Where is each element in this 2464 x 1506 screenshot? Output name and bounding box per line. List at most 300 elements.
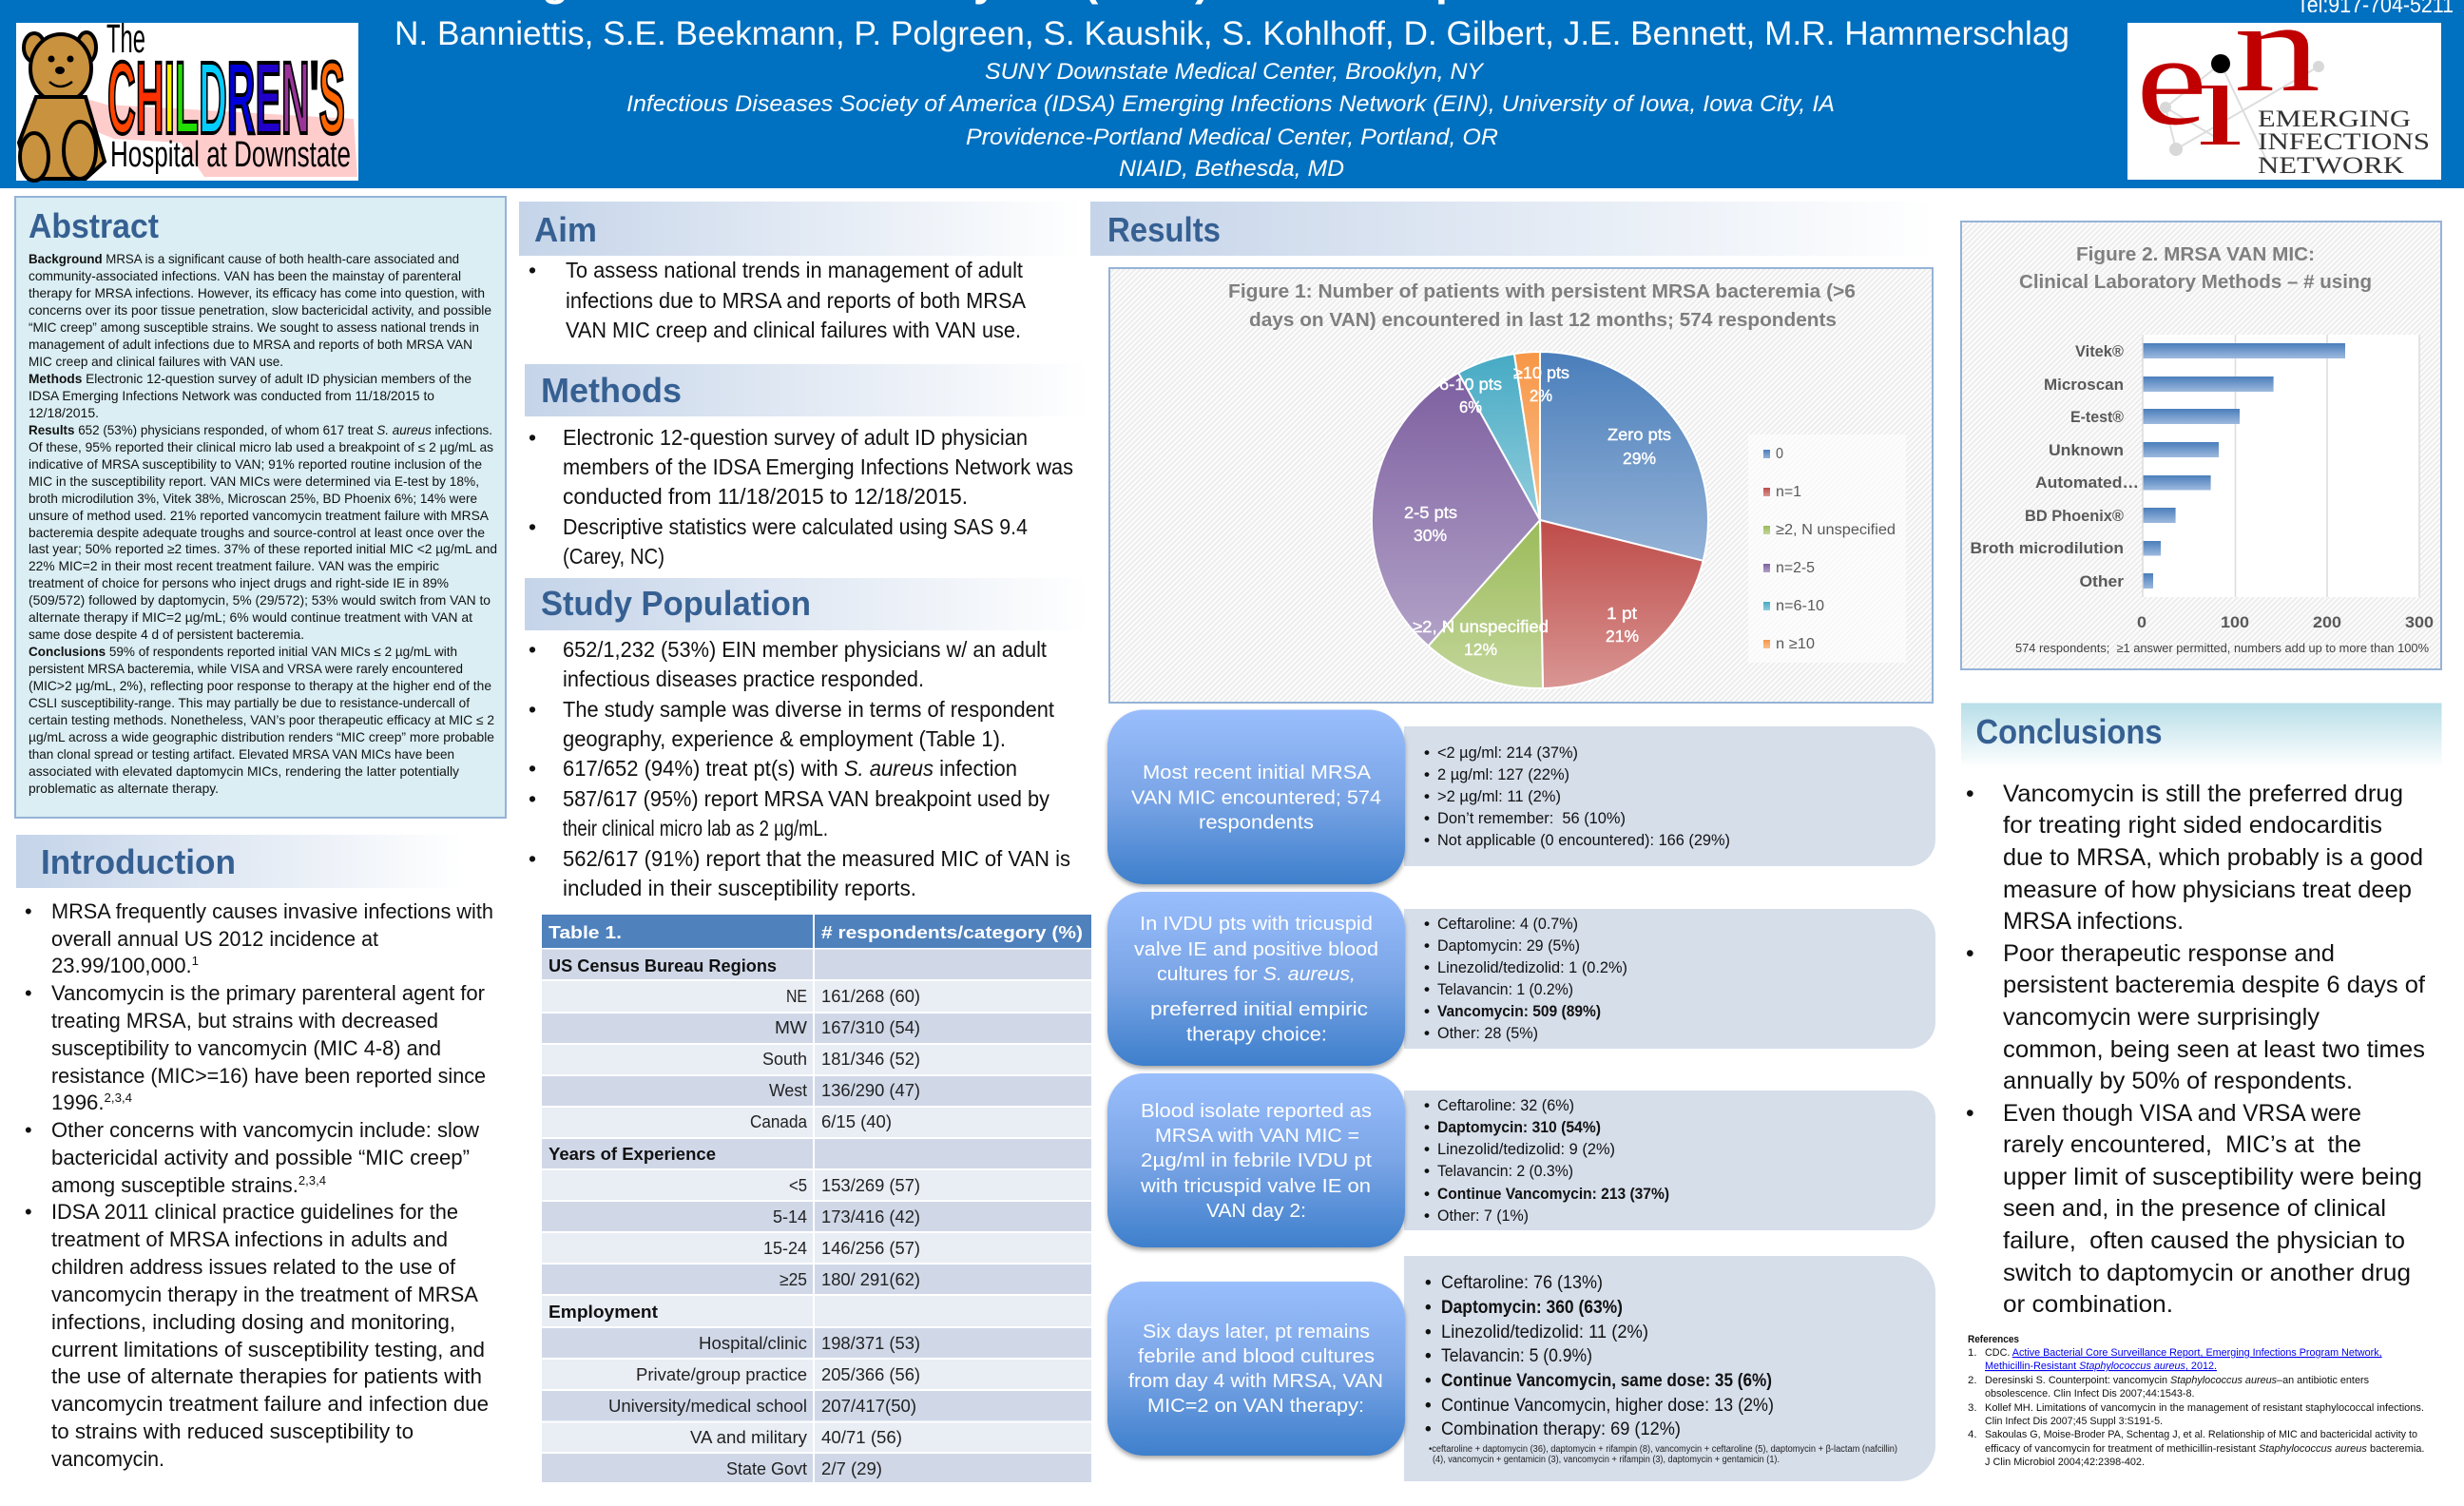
question box: VAN day 2: [1206, 1201, 1306, 1222]
question box [1107, 892, 1405, 1066]
result row 3: VAN MIC 2 on day 2 [1107, 1073, 1935, 1247]
question box: with tricuspid valve IE on [1140, 1176, 1371, 1197]
answers list: Not applicable (0 encountered): 166 (29%) [1437, 831, 1730, 849]
abstract body text: (MIC>2 µg/mL, 2%), reflecting poor response to therapy at the higher end of the [29, 679, 491, 693]
bar category labels [1970, 342, 2139, 590]
answers list: • [1424, 831, 1430, 849]
conclusions bullet list: upper limit of susceptibility were being [2003, 1165, 2422, 1190]
result row 4: six days later [1107, 1256, 1935, 1481]
panel: aim [519, 202, 1084, 342]
abstract body text: concerns over its poor tissue penetration, slow bactericidal activity, and possible [29, 303, 491, 318]
answers list: • [1424, 765, 1430, 783]
abstract body text: 22% MIC=2 in their most recent treatment failure. VAN was the empiric [29, 559, 439, 573]
table rows: 180/ 291(62) [821, 1269, 920, 1289]
question box: cultures for S. aureus, [1157, 964, 1356, 985]
abstract body text [29, 252, 497, 796]
table rows: 207/417(50) [821, 1396, 916, 1416]
abstract body text: problematic as alternate therapy. [29, 782, 219, 796]
figure 2: bar chart panel [1961, 222, 2441, 669]
icon: Emerging Infections Network logo: EMERGING [2258, 106, 2411, 132]
answers list: Don’t remember: 56 (10%) [1437, 809, 1626, 827]
question box: VAN MIC encountered; 574 [1131, 787, 1381, 808]
figure 2 title: Clinical Laboratory Methods – # using [2019, 271, 2372, 293]
figure 2 title: Figure 2. MRSA VAN MIC: [2076, 243, 2315, 265]
icon: Emerging Infections Network logo: INFECTIONS [2258, 129, 2430, 155]
heading: study population: Study Population [541, 584, 811, 623]
references: CDC. Active Bacterial Core Surveillance Report, Emerging Infections Program Network, [1985, 1347, 2382, 1359]
abstract body text: 12/18/2015. [29, 406, 99, 420]
combination therapy footnote [1429, 1444, 1897, 1465]
table rows: Employment [549, 1302, 658, 1322]
introduction bullet list: MRSA frequently causes invasive infections with [51, 899, 493, 923]
figure 1 title: Figure 1: Number of patients with persistent MRSA bacteremia (>6 [1228, 280, 1856, 302]
abstract body text: broth microdilution 3%, Vitek 38%, Microscan 25%, BD Phoenix 6%; 14% were [29, 492, 477, 506]
answers list: Other: 7 (1%) [1437, 1207, 1529, 1225]
study population text: 617/652 (94%) treat pt(s) with S. aureus infection [563, 756, 1017, 781]
question box: Most recent initial MRSA [1143, 763, 1372, 783]
heading: abstract: Abstract [29, 206, 159, 245]
aim text: To assess national trends in management of adult [566, 258, 1024, 282]
table rows: 181/346 (52) [821, 1049, 920, 1069]
bar value axis labels: 200 [2313, 613, 2341, 631]
figure 1: pie chart panel [1109, 268, 1933, 703]
pie legend [1748, 434, 1906, 663]
answers list: Daptomycin: 360 (63%) [1441, 1298, 1623, 1318]
panel: study population [525, 578, 1089, 900]
result row 1: most recent initial MIC [1107, 709, 1935, 884]
references: J Clin Microbiol 2004;42:2398-402. [1985, 1457, 2145, 1468]
conclusions bullet list: for treating right sided endocarditis [2003, 813, 2382, 839]
bar category labels: BD Phoenix® [2025, 507, 2124, 525]
methods text: Descriptive statistics were calculated using SAS 9.4 [563, 514, 1028, 539]
answers list: 2 µg/ml: 127 (22%) [1437, 765, 1569, 783]
answers list: • [1425, 1371, 1432, 1391]
introduction bullet list: current limitations of susceptibility testing, and [51, 1338, 485, 1361]
answers list: Ceftaroline: 76 (13%) [1441, 1273, 1603, 1293]
bar category labels: Vitek® [2075, 342, 2124, 360]
pie data labels: 6-10 pts [1439, 375, 1502, 394]
bar value axis labels: 100 [2221, 613, 2249, 631]
answers list: Telavancin: 5 (0.9%) [1441, 1346, 1592, 1366]
question box: respondents [1199, 813, 1314, 834]
answers list: Continue Vancomycin: 213 (37%) [1437, 1185, 1669, 1203]
references: Sakoulas G, Moise-Broder PA, Schentag J, et al. Relationship of MIC and bactericidal activity to [1985, 1429, 2417, 1440]
references: References [1968, 1334, 2019, 1345]
conclusions bullet list: rarely encountered, MIC’s at the [2003, 1132, 2361, 1158]
abstract body text: (509/572) followed by daptomycin, 5% (29/572); 53% would switch from VAN to [29, 593, 491, 608]
table rows: 136/290 (47) [821, 1080, 920, 1100]
introduction bullet list: 1 [192, 954, 199, 968]
references [1968, 1334, 2424, 1468]
table rows: State Govt [726, 1458, 807, 1478]
table rows: Years of Experience [549, 1144, 716, 1164]
introduction bullet list: resistance (MIC>=16) have been reported since [51, 1064, 486, 1088]
pie legend: ≥2, N unspecified [1776, 522, 1896, 538]
answers list: • [1425, 1346, 1432, 1366]
table rows: MW [775, 1017, 808, 1037]
answers list: • [1424, 958, 1430, 976]
answers list [1425, 1273, 1774, 1439]
table rows: 6/15 (40) [821, 1111, 892, 1131]
introduction bullet list: • [25, 981, 32, 1005]
table rows: 15-24 [763, 1238, 807, 1258]
answers list: Telavancin: 1 (0.2%) [1437, 980, 1573, 998]
introduction bullet list: infections, including dosing and monitoring, [51, 1310, 455, 1334]
affiliations: Infectious Diseases Society of America (IDSA) Emerging Infections Network (EIN), University of Iowa, Iowa City, IA [626, 91, 1835, 117]
pie legend: n ≥10 [1776, 636, 1815, 652]
table header [542, 915, 1091, 948]
abstract body text: Background MRSA is a significant cause of both health-care associated and [29, 252, 459, 266]
answers list: • [1425, 1323, 1432, 1342]
introduction bullet list: • [25, 899, 32, 923]
study population text: their clinical micro lab as 2 µg/mL. [563, 816, 828, 840]
table rows [542, 915, 1091, 1482]
table rows: 198/371 (53) [821, 1333, 920, 1353]
abstract body text: MIC creep and clinical failures with VAN use. [29, 355, 283, 369]
header band [0, 0, 2464, 188]
bar category labels: Microscan [2044, 376, 2124, 394]
introduction bullet list: bactericidal activity and possible “MIC creep” [51, 1146, 470, 1169]
panel: results heading bar: Results [1107, 210, 1221, 249]
aim text: infections due to MRSA and reports of both MRSA [566, 288, 1027, 313]
answers list: • [1424, 1162, 1430, 1180]
answers list [1424, 915, 1627, 1042]
table rows: West [769, 1080, 807, 1100]
introduction bullet list: susceptibility to vancomycin (MIC 4-8) and [51, 1036, 441, 1060]
question box: MIC=2 on VAN therapy: [1147, 1396, 1364, 1417]
question box: Six days later, pt remains [1143, 1322, 1370, 1342]
pie data labels: 30% [1414, 526, 1447, 545]
conclusions bullet list: measure of how physicians treat deep [2003, 878, 2412, 903]
question box: In IVDU pts with tricuspid [1140, 914, 1373, 935]
title (cropped at the top edge, only descenders visible) [542, 0, 1462, 5]
answers list: Ceftaroline: 32 (6%) [1437, 1096, 1574, 1114]
table rows: South [762, 1049, 807, 1069]
pie legend: 0 [1776, 446, 1783, 462]
introduction bullet list [25, 899, 493, 1471]
question box: preferred initial empiric [1150, 999, 1368, 1020]
answers list: • [1425, 1419, 1432, 1439]
abstract body text: Methods Electronic 12-question survey of adult ID physician members of the [29, 372, 472, 386]
table rows: 40/71 (56) [821, 1427, 902, 1447]
introduction bullet list: treating MRSA, but strains with decreased [51, 1009, 438, 1033]
answers list: • [1424, 787, 1430, 805]
references: 1. [1968, 1347, 1977, 1359]
answers list: Linezolid/tedizolid: 1 (0.2%) [1437, 958, 1627, 976]
introduction bullet list: Vancomycin is the primary parenteral agent for [51, 981, 485, 1005]
answers list: Daptomycin: 29 (5%) [1437, 936, 1580, 955]
study population text: infectious diseases practice responded. [563, 666, 924, 691]
table rows: 5-14 [773, 1207, 807, 1226]
abstract body text: certain testing methods. Nonetheless, VAN’s poor therapeutic efficacy at MIC ≤ 2 [29, 713, 494, 727]
answers list: Linezolid/tedizolid: 9 (2%) [1437, 1140, 1615, 1158]
table rows: VA and military [690, 1427, 808, 1447]
pie data labels: 21% [1606, 627, 1639, 646]
panel: abstract [15, 197, 506, 818]
table rows: NE [786, 986, 807, 1006]
heading: introduction: Introduction [41, 842, 236, 881]
study population text: • [529, 846, 536, 871]
conclusions bullet list [1966, 782, 2425, 1318]
table rows: 146/256 (57) [821, 1238, 920, 1258]
abstract body text: bacteremia despite adequate troughs and source-control at least once over the [29, 526, 485, 540]
affiliations: SUNY Downstate Medical Center, Brooklyn, NY [985, 59, 1485, 85]
affiliations [626, 59, 1835, 182]
conclusions bullet list: MRSA infections. [2003, 909, 2184, 935]
introduction bullet list: 2,3,4 [298, 1173, 326, 1187]
conclusions bullet list: seen and, in the presence of clinical [2003, 1196, 2386, 1222]
icon: Emerging Infections Network logo: e [2136, 10, 2207, 152]
question box: febrile and blood cultures [1138, 1346, 1375, 1367]
pie legend: n=6-10 [1776, 598, 1824, 614]
question box: MRSA with VAN MIC = [1155, 1126, 1359, 1147]
table rows: <5 [789, 1175, 807, 1195]
table rows: 2/7 (29) [821, 1458, 882, 1478]
icon: Children's Hospital at Downstate logo: Hospital at Downstate [110, 135, 351, 175]
study population text: • [529, 756, 536, 781]
combination therapy footnote: •ceftaroline + daptomycin (36), daptomycin + rifampin (8), vancomycin + ceftaroline (5), daptomycin + β-lactam (nafcillin) [1429, 1444, 1897, 1455]
answers list: Vancomycin: 509 (89%) [1437, 1002, 1601, 1020]
conclusions bullet list: switch to daptomycin or another drug [2003, 1261, 2411, 1286]
introduction bullet list: Other concerns with vancomycin include: slow [51, 1118, 479, 1142]
conclusions bullet list: • [1966, 1101, 1974, 1127]
answers list: • [1424, 1118, 1430, 1136]
answers list: >2 µg/ml: 11 (2%) [1437, 787, 1561, 805]
answers list: Other: 28 (5%) [1437, 1024, 1538, 1042]
abstract body text: same dose despite 4 d of persistent bacteremia. [29, 628, 304, 642]
pie data labels: 29% [1623, 449, 1656, 468]
icon: Emerging Infections Network logo [2127, 0, 2441, 180]
bar chart plot area [2143, 335, 2419, 597]
answers list: • [1424, 1024, 1430, 1042]
figure 2 title [2019, 243, 2372, 293]
question box [1107, 1073, 1405, 1247]
table rows: Private/group practice [636, 1364, 807, 1384]
methods text: conducted from 11/18/2015 to 12/18/2015. [563, 484, 968, 509]
heading: aim: Aim [534, 210, 597, 249]
introduction bullet list: vancomycin. [51, 1447, 164, 1471]
bar value axis labels [2137, 613, 2434, 631]
affiliations: NIAID, Bethesda, MD [1119, 156, 1344, 182]
conclusions bullet list: Poor therapeutic response and [2003, 941, 2335, 967]
table rows: US Census Bureau Regions [549, 956, 777, 975]
study population text: geography, experience & employment (Table 1). [563, 726, 1006, 751]
study population text: • [529, 637, 536, 662]
pie data labels: ≥10 pts [1513, 363, 1569, 382]
question box: therapy choice: [1186, 1025, 1327, 1046]
answers list: Ceftaroline: 4 (0.7%) [1437, 915, 1578, 933]
pie data labels: 1 pt [1607, 604, 1637, 623]
conclusions bullet list: annually by 50% of respondents. [2003, 1069, 2353, 1094]
abstract body text: CSLI susceptibility-range. This may partially be due to resistance-undercall of [29, 696, 470, 710]
bar chart note: 574 respondents; ≥1 answer permitted, numbers add up to more than 100% [2015, 641, 2429, 655]
conclusions bullet list: or combination. [2003, 1292, 2173, 1318]
answers list: • [1424, 1140, 1430, 1158]
abstract body text: treatment of choice for persons who inject drugs and right-side IE in 89% [29, 576, 449, 590]
bar category labels: E-test® [2070, 408, 2124, 426]
pie data labels: 2% [1530, 386, 1552, 405]
abstract body text: community-associated infections. VAN has been the mainstay of parenteral [29, 269, 461, 283]
introduction bullet list: overall annual US 2012 incidence at [51, 927, 378, 951]
study population text: 562/617 (91%) report that the measured MIC of VAN is [563, 846, 1070, 871]
abstract body text: Conclusions 59% of respondents reported initial VAN MICs ≤ 2 µg/mL with [29, 645, 457, 659]
bar category labels: Automated… [2035, 473, 2139, 492]
methods text: (Carey, NC) [563, 544, 664, 569]
answers list: • [1424, 1207, 1430, 1225]
pie data labels: 6% [1459, 397, 1482, 416]
introduction bullet list: IDSA 2011 clinical practice guidelines for the [51, 1200, 458, 1224]
result row 2: IVDU preferred empiric therapy [1107, 892, 1935, 1066]
abstract body text: associated with elevated daptomycin MICs, rendering the latter potentially [29, 764, 459, 779]
authors: N. Banniettis, S.E. Beekmann, P. Polgreen, S. Kaushik, S. Kohlhoff, D. Gilbert, J.E. Bennett, M.R. Hammerschlag [395, 15, 2069, 52]
icon: Emerging Infections Network logo: NETWORK [2258, 153, 2404, 179]
introduction bullet list: 2,3,4 [105, 1091, 132, 1105]
figure 1 title [1228, 280, 1856, 331]
abstract body text: “MIC creep” among susceptible strains. We sought to assess national trends in [29, 320, 479, 335]
table rows: University/medical school [608, 1396, 807, 1416]
abstract body text: than clonal spread or testing artifact. Elevated MRSA VAN MICs have been [29, 747, 454, 762]
study population text: 652/1,232 (53%) EIN member physicians w/ an adult [563, 637, 1048, 662]
conclusions bullet list: Vancomycin is still the preferred drug [2003, 782, 2403, 807]
bar category labels: Broth microdilution [1970, 539, 2124, 557]
abstract body text: IDSA Emerging Infections Network was conducted from 11/18/2015 to [29, 389, 434, 403]
table rows: ≥25 [780, 1269, 807, 1289]
pie legend: n=1 [1776, 484, 1801, 500]
conclusions bullet list: Even though VISA and VRSA were [2003, 1101, 2361, 1127]
pie slices [1372, 352, 1708, 688]
question box: Blood isolate reported as [1141, 1101, 1372, 1122]
question box: 2µg/ml in febrile IVDU pt [1141, 1150, 1372, 1171]
table rows: 173/416 (42) [821, 1207, 920, 1226]
references: Kollef MH. Limitations of vancomycin in the management of resistant staphylococcal infections. [1985, 1402, 2424, 1414]
conclusions bullet list: due to MRSA, which probably is a good [2003, 845, 2423, 871]
icon: Children's Hospital at Downstate logo [16, 16, 358, 181]
bar category labels: Unknown [2049, 441, 2124, 459]
table rows: 205/366 (56) [821, 1364, 920, 1384]
references: Methicillin-Resistant Staphylococcus aureus, 2012. [1985, 1361, 2217, 1372]
references: 3. [1968, 1402, 1977, 1414]
table rows: 153/269 (57) [821, 1175, 920, 1195]
pie data labels: ≥2, N unspecified [1413, 617, 1549, 636]
table header: Table 1. [549, 922, 622, 942]
answers list: Linezolid/tedizolid: 11 (2%) [1441, 1323, 1648, 1342]
references: efficacy of vancomycin for treatment of methicillin-resistant Staphylococcus aureus bacteremia. [1985, 1443, 2424, 1455]
panel: methods [525, 364, 1089, 569]
abstract body text: Of these, 95% reported their clinical micro lab used a breakpoint of ≤ 2 µg/mL as [29, 440, 493, 454]
references: 2. [1968, 1375, 1977, 1386]
answers list: • [1425, 1298, 1432, 1318]
study population text: 587/617 (95%) report MRSA VAN breakpoint used by [563, 786, 1049, 811]
question box: from day 4 with MRSA, VAN [1128, 1371, 1383, 1392]
answers list: Continue Vancomycin, same dose: 35 (6%) [1441, 1371, 1772, 1391]
answers list [1424, 743, 1730, 849]
introduction bullet list: vancomycin therapy in the treatment of MRSA [51, 1283, 478, 1306]
introduction bullet list: to strains with reduced susceptibility to [51, 1419, 414, 1443]
abstract body text: alternate therapy if MIC=2 µg/mL; 6% would continue treatment with VAN at [29, 610, 472, 625]
answers list: • [1424, 1002, 1430, 1020]
references: 4. [1968, 1429, 1977, 1440]
study population text: The study sample was diverse in terms of respondent [563, 697, 1055, 722]
table 1: respondents by category [542, 915, 1091, 1482]
table rows: Canada [750, 1111, 808, 1131]
affiliations: Providence-Portland Medical Center, Portland, OR [966, 125, 1498, 150]
question box: valve IE and positive blood [1134, 939, 1378, 960]
introduction bullet list: children address issues related to the use of [51, 1255, 456, 1279]
abstract body text: therapy for MRSA infections. However, its efficacy has come into question, with [29, 286, 485, 300]
answers list: <2 µg/ml: 214 (37%) [1437, 743, 1578, 762]
panel: introduction [16, 835, 493, 1471]
introduction bullet list: 1996. [51, 1091, 104, 1114]
aim text: VAN MIC creep and clinical failures with VAN use. [566, 318, 1021, 342]
bar value axis labels: 0 [2137, 613, 2146, 631]
introduction bullet list: treatment of MRSA infections in adults and [51, 1227, 448, 1251]
answers list [1424, 1096, 1669, 1225]
pie data labels [1404, 363, 1671, 659]
conclusions bullet list: • [1966, 941, 1974, 967]
aim text [529, 258, 1027, 342]
table header: # respondents/category (%) [821, 922, 1083, 942]
study population text: • [529, 697, 536, 722]
heading: methods: Methods [541, 371, 682, 410]
introduction bullet list: the use of alternate therapies for patients with [51, 1364, 482, 1388]
abstract body text: management of adult infections due to MRSA and reports of both MRSA VAN [29, 338, 472, 352]
methods text [529, 425, 1073, 569]
answers list: Daptomycin: 310 (54%) [1437, 1118, 1601, 1136]
answers list: • [1424, 915, 1430, 933]
methods text: members of the IDSA Emerging Infections Network was [563, 454, 1073, 479]
pie legend: n=2-5 [1776, 560, 1815, 576]
answers list: • [1425, 1273, 1432, 1293]
answers list: Combination therapy: 69 (12%) [1441, 1419, 1681, 1439]
references: Clin Infect Dis 2007;45 Suppl 3:S191-5. [1985, 1416, 2163, 1427]
abstract body text: unsure of method used. 21% reported vancomycin treatment failure with MRSA [29, 509, 490, 523]
methods text: Electronic 12-question survey of adult ID physician [563, 425, 1028, 450]
combination therapy footnote: (4), vancomycin + gentamicin (3), vancomycin + rifampin (3), daptomycin + gentamicin (1). [1433, 1455, 1780, 1465]
abstract body text: MIC in the susceptibility report. VAN MICs were determined via E-test by 18%, [29, 474, 479, 489]
answers list: • [1424, 980, 1430, 998]
abstract body text: indicative of MRSA susceptibility to VAN; 91% reported routine inclusion of the [29, 457, 482, 472]
icon: Children's Hospital at Downstate logo: The [106, 16, 145, 62]
answers list: Continue Vancomycin, higher dose: 13 (2%) [1441, 1396, 1774, 1416]
conclusions bullet list: failure, often caused the physician to [2003, 1228, 2405, 1254]
conclusions bullet list: common, being seen at least two times [2003, 1037, 2425, 1063]
conclusions bullet list: vancomycin were surprisingly [2003, 1005, 2320, 1031]
pie data labels: 2-5 pts [1404, 503, 1457, 522]
figure 1 title: days on VAN) encountered in last 12 months; 574 respondents [1249, 309, 1837, 331]
abstract body text: persistent MRSA bacteremia, while VISA and VRSA were rarely encountered [29, 662, 463, 676]
answers list: • [1424, 1185, 1430, 1203]
answers list: • [1424, 936, 1430, 955]
introduction bullet list: 23.99/100,000. [51, 954, 189, 977]
study population text: • [529, 786, 536, 811]
answers list: • [1425, 1396, 1432, 1416]
methods text: • [529, 425, 536, 450]
study population text [529, 637, 1070, 900]
study population text: included in their susceptibility reports. [563, 876, 916, 900]
pie data labels: Zero pts [1607, 425, 1671, 444]
icon: Children's Hospital at Downstate logo: CHILDREN'S [107, 40, 345, 155]
introduction bullet list: • [25, 1118, 32, 1142]
introduction bullet list: vancomycin treatment failure and infection due [51, 1392, 489, 1416]
panel: results heading bar [1090, 202, 1936, 256]
question box [1107, 709, 1405, 884]
methods text: • [529, 514, 536, 539]
conclusions bullet list: persistent bacteremia despite 6 days of [2003, 973, 2425, 998]
table rows: 161/268 (60) [821, 986, 920, 1006]
abstract body text: µg/mL across a wide geographic distribution renders “MIC creep” more probable [29, 730, 494, 744]
table rows: Hospital/clinic [699, 1333, 807, 1353]
answers list: • [1424, 1096, 1430, 1114]
